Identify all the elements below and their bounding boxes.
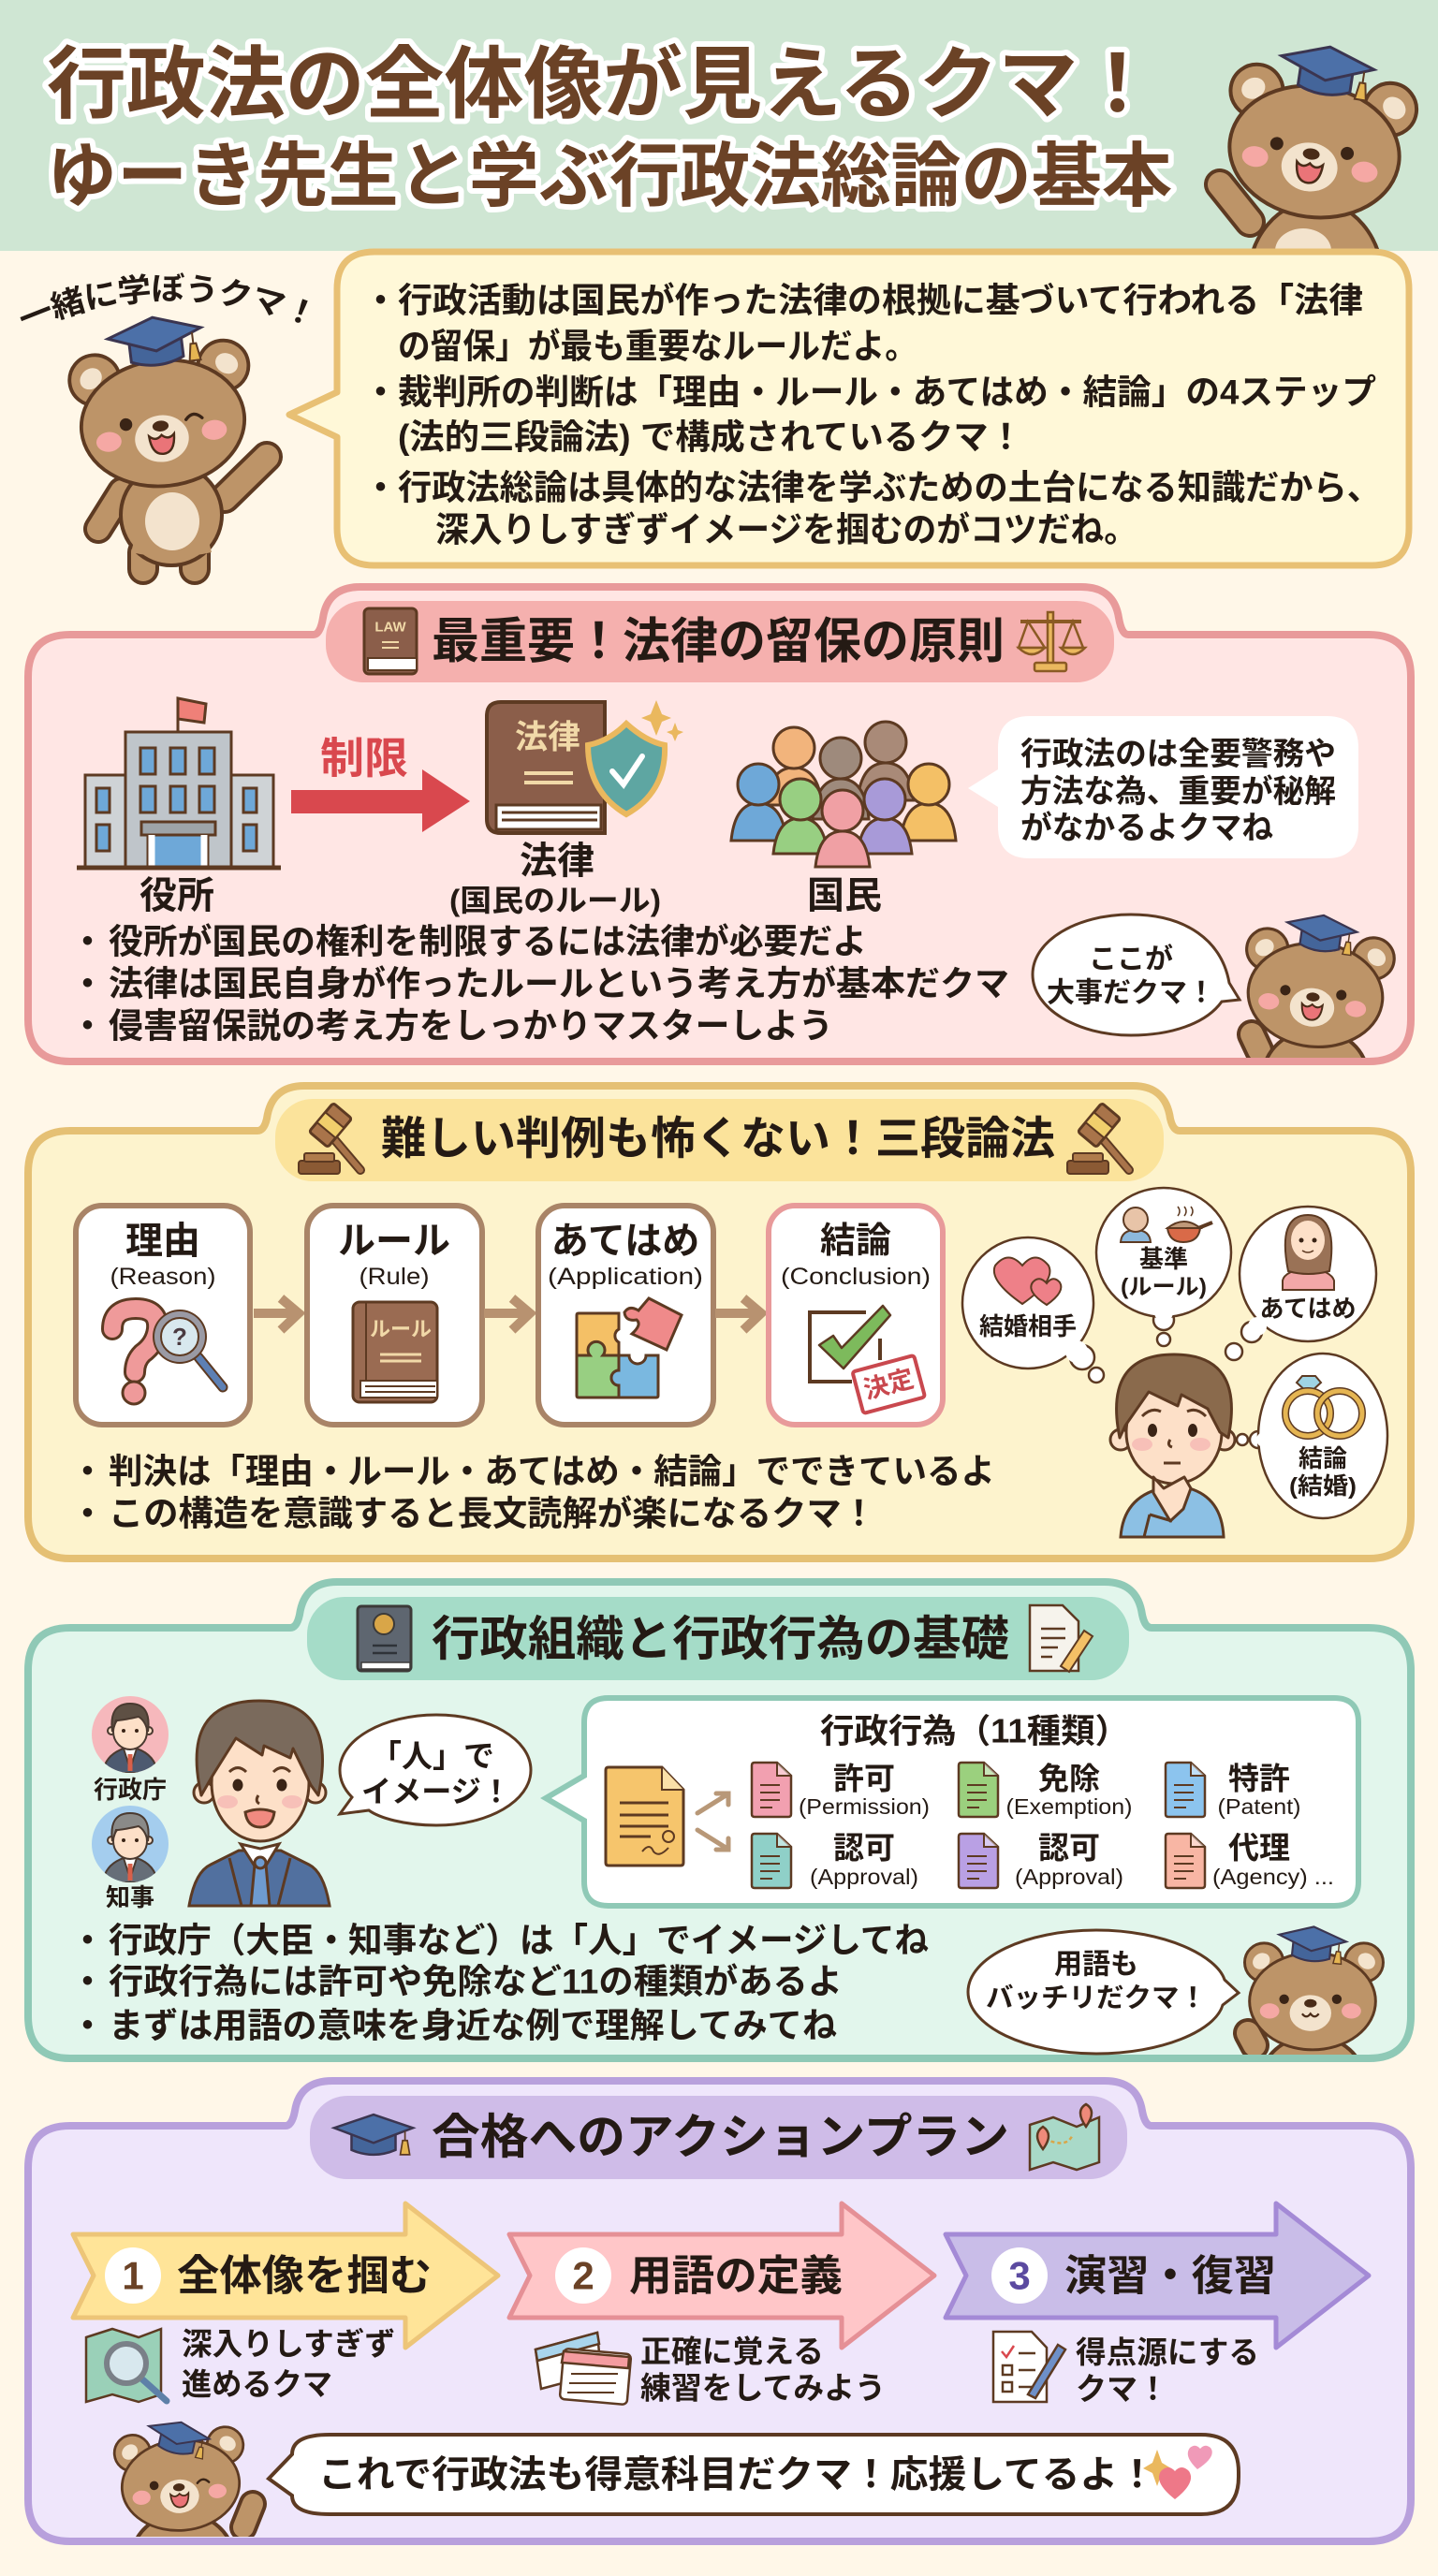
icon: passport book <box>358 1606 411 1671</box>
step 3 note: クマ！ <box>1076 2372 1168 2406</box>
thought bubble: 結論(結婚): (結婚) <box>1289 1473 1357 1500</box>
closing speech bubble <box>269 2435 1239 2514</box>
icon: scales <box>1019 612 1085 671</box>
step 2 note: 正確に覚える <box>640 2334 824 2368</box>
intro bullet points: ・ <box>363 468 398 507</box>
icon: graduation cap <box>334 2115 413 2155</box>
intro bullet points: 行政法総論は具体的な法律を学ぶための土台になる知識だから、 <box>398 468 1381 507</box>
heading pill <box>275 1099 1164 1181</box>
type: 代理 Agency: 代理 <box>1228 1831 1290 1865</box>
arrow <box>254 1298 299 1330</box>
callout: 人でイメージ: イメージ！ <box>361 1775 511 1808</box>
bullet list: 法律は国民自身が作ったルールという考え方が基本だクマ <box>109 964 1009 1003</box>
step 1 arrow: 全体像を掴む <box>177 2252 432 2299</box>
type: 特許 Patent <box>1166 1762 1301 1819</box>
step card: ルール: (Rule) <box>360 1264 429 1290</box>
thought bubble: あてはめ: あてはめ <box>1260 1295 1356 1323</box>
thought bubble: 結婚相手 <box>962 1237 1104 1383</box>
step 3 note <box>993 2332 1259 2406</box>
bullet list: 行政行為には許可や免除など11の種類があるよ <box>109 1962 843 2001</box>
thought bubble: 結婚相手: 結婚相手 <box>979 1312 1077 1340</box>
step card: 結論: 結論 <box>820 1222 891 1261</box>
intro bullet points: 深入りしすぎずイメージを掴むのがコツだね。 <box>435 511 1137 549</box>
bullet list: ・ <box>70 1007 105 1045</box>
arrow <box>715 1298 761 1330</box>
type: 免除 Exemption: 免除 <box>1038 1762 1100 1795</box>
panel: アクションプラン <box>28 2081 1411 2576</box>
arrows <box>697 1793 728 1850</box>
bullet list <box>70 923 1009 1045</box>
icon: rule book: ルール <box>370 1318 432 1340</box>
diagram labels <box>139 841 882 917</box>
panel: 行政行為 11 types <box>546 1698 1358 1906</box>
heading pill: 最重要！法律の留保の原則 <box>432 615 1005 669</box>
intro bullet points: 行政活動は国民が作った法律の根拠に基づいて行われる「法律 <box>398 281 1363 320</box>
bullet list: まずは用語の意味を身近な例で理解してみてね <box>109 2007 837 2044</box>
heading pill: 合格へのアクションプラン <box>432 2110 1009 2164</box>
bullet list: 侵害留保説の考え方をしっかりマスターしよう <box>109 1007 833 1045</box>
step card: 理由: 理由 <box>125 1221 200 1262</box>
icon: gavel right <box>1067 1103 1129 1174</box>
bullet list: ・ <box>70 1453 105 1490</box>
icon: citizens group <box>731 722 956 867</box>
callout: 人でイメージ <box>340 1715 531 1825</box>
bear <box>1233 1925 1385 2055</box>
step 1 arrow <box>73 2203 498 2348</box>
callout: 用語もバッチリ: バッチリだクマ！ <box>986 1983 1207 2013</box>
callout: ここが大事だクマ: 大事だクマ！ <box>1047 977 1215 1009</box>
type: 認可 Approval teal: (Approval) <box>810 1865 918 1889</box>
callout: 用語もバッチリ: 用語も <box>1054 1949 1138 1981</box>
intro bullet points: の留保」が最も重要なルールだよ。 <box>398 328 917 365</box>
header bear <box>1204 45 1419 249</box>
character: thinking boy <box>1110 1354 1235 1537</box>
type: 免除 Exemption <box>959 1762 1133 1819</box>
icon: law book with shield <box>487 700 683 833</box>
white speech bubble: 行政法のは全要警務や <box>1020 737 1336 772</box>
avatar: 知事 <box>92 1806 169 1911</box>
step 2 arrow: 2 <box>572 2254 594 2297</box>
bullet list: ・ <box>70 964 105 1003</box>
step card: 理由: (Reason) <box>110 1264 215 1290</box>
step 2 arrow <box>509 2203 934 2348</box>
icon: check and stamp: 決定 <box>860 1364 917 1404</box>
icon: question and magnifier <box>112 1309 223 1404</box>
type: 許可 Permission <box>752 1762 930 1819</box>
icon: checklist and pen <box>993 2332 1065 2402</box>
step 1 note: 深入りしすぎず <box>182 2327 395 2361</box>
step card: 結論 <box>769 1206 943 1425</box>
type: 免除 Exemption: (Exemption) <box>1005 1794 1133 1819</box>
diagram labels: (国民のルール) <box>449 884 661 917</box>
thought bubble: 基準: 基準 <box>1139 1245 1188 1273</box>
step 1 note: 進めるクマ <box>182 2366 332 2402</box>
character: explaining man <box>189 1701 330 1906</box>
title: 行政法の全体像が見えるクマ！ <box>47 40 1157 128</box>
heading pill: 難しい判例も怖くない！三段論法 <box>381 1114 1055 1164</box>
arrow <box>484 1298 530 1330</box>
type: 認可 Approval teal <box>752 1831 918 1889</box>
intro bullet points: ・ <box>363 281 398 320</box>
bullet list: 役所が国民の権利を制限するには法律が必要だよ <box>109 923 867 960</box>
step card: あてはめ <box>538 1206 713 1425</box>
bullet list: ・ <box>70 1921 105 1960</box>
panel: 行政組織と行政行為 <box>24 1578 1415 2062</box>
type: 許可 Permission: (Permission) <box>799 1794 930 1819</box>
diagram labels: 法律 <box>520 841 594 882</box>
type: 代理 Agency: (Agency) ... <box>1212 1865 1334 1889</box>
icon: question and magnifier: ? <box>172 1323 187 1351</box>
step card: あてはめ: (Application) <box>548 1264 703 1290</box>
thought bubble: 結論(結婚) <box>1237 1354 1387 1518</box>
step card: 理由 <box>76 1206 250 1425</box>
bear <box>112 2421 267 2537</box>
type: 代理 Agency <box>1166 1831 1334 1889</box>
icon: sparkle and hearts <box>1143 2446 1212 2499</box>
step 3 arrow <box>946 2203 1369 2348</box>
thought bubble: 基準: (ルール) <box>1121 1275 1207 1299</box>
icon: flash cards <box>536 2333 631 2405</box>
avatar: 知事: 知事 <box>106 1883 154 1911</box>
step 1 note <box>86 2327 395 2402</box>
bullet list: ・ <box>70 923 105 960</box>
arrow: 制限 <box>291 734 470 832</box>
icon: law book with shield: 法律 <box>515 719 580 756</box>
bullet list: ・ <box>70 1494 105 1533</box>
diagram labels: 役所 <box>139 875 214 916</box>
diagram labels: 国民 <box>807 875 882 916</box>
step card: ルール <box>307 1206 482 1425</box>
icon: route map <box>1030 2104 1099 2170</box>
type: 認可 Approval purple: (Approval) <box>1015 1865 1123 1889</box>
bullet list <box>70 1453 995 1533</box>
title <box>47 40 1172 215</box>
step 3 arrow: 3 <box>1008 2254 1031 2297</box>
intro bullet points: (法的三段論法) で構成されているクマ！ <box>398 417 1023 457</box>
icon: document and pencil <box>1030 1605 1093 1672</box>
bullet list: 行政庁（大臣・知事など）は「人」でイメージしてね <box>109 1921 929 1960</box>
step card: 結論: (Conclusion) <box>781 1264 931 1290</box>
step 2 note <box>536 2333 886 2406</box>
step card: あてはめ: あてはめ <box>551 1221 699 1262</box>
type: 許可 Permission: 許可 <box>833 1762 895 1795</box>
icon: rule book <box>353 1302 437 1402</box>
icon: puzzle <box>577 1298 682 1398</box>
white speech bubble <box>968 716 1358 858</box>
white speech bubble: がなかるよクマね <box>1020 810 1273 846</box>
bullet list: この構造を意識すると長文読解が楽になるクマ！ <box>109 1494 876 1533</box>
panel: 三段論法 <box>28 1086 1411 1559</box>
icon: law book <box>364 608 417 674</box>
callout: 人でイメージ: 「人」で <box>371 1739 494 1773</box>
type: 認可 Approval purple: 認可 <box>1038 1831 1100 1865</box>
header band <box>0 0 1438 251</box>
step 2 arrow: 用語の定義 <box>629 2252 843 2299</box>
step 3 note: 得点源にする <box>1076 2334 1259 2370</box>
avatar: 行政庁 <box>92 1696 169 1804</box>
icon: government building <box>77 698 281 868</box>
icon: certificate <box>606 1767 683 1866</box>
thought bubble: 基準 <box>1096 1188 1231 1346</box>
step card: ルール: ルール <box>338 1221 450 1262</box>
panel: 行政行為 11 types: 行政行為（11種類） <box>820 1711 1129 1750</box>
curved caption: 一緒に学ぼうクマ！ <box>21 272 308 323</box>
thought bubble: あてはめ <box>1225 1207 1376 1360</box>
arrow: 制限: 制限 <box>320 734 408 783</box>
heading pill: 行政組織と行政行為の基礎 <box>432 1612 1009 1666</box>
step 2 note: 練習をしてみよう <box>640 2370 886 2406</box>
avatar: 行政庁: 行政庁 <box>94 1776 167 1804</box>
thought bubble: 結論(結婚): 結論 <box>1299 1444 1347 1472</box>
step 1 arrow: 1 <box>122 2254 144 2297</box>
type: 認可 Approval teal: 認可 <box>833 1831 895 1865</box>
bear <box>1237 914 1396 1058</box>
heading pill <box>326 601 1114 682</box>
title: ゆーき先生と学ぶ行政法総論の基本 <box>47 137 1172 215</box>
icon: law book: LAW <box>374 620 407 635</box>
callout: ここが大事だクマ: ここが <box>1089 944 1173 975</box>
intro bear with caption <box>21 272 308 585</box>
bullet list: ・ <box>70 1962 105 2001</box>
panel: 法律の留保の原則 <box>28 587 1411 1123</box>
closing speech bubble: これで行政法も得意科目だクマ！応援してるよ！ <box>318 2454 1156 2496</box>
intro speech bubble <box>289 252 1409 565</box>
intro bullet points <box>363 281 1381 549</box>
bullet list: ・ <box>70 2007 105 2044</box>
intro bullet points: 裁判所の判断は「理由・ルール・あてはめ・結論」の4ステップ <box>398 373 1376 412</box>
icon: gavel left <box>299 1103 360 1174</box>
heading pill <box>307 1597 1129 1680</box>
heading pill <box>310 2096 1127 2179</box>
bullet list: 判決は「理由・ルール・あてはめ・結論」でできているよ <box>109 1453 995 1490</box>
callout: 用語もバッチリ <box>968 1930 1239 2054</box>
white speech bubble: 方法な為、重要が秘解 <box>1020 773 1336 810</box>
intro bullet points: ・ <box>363 373 398 412</box>
type: 認可 Approval purple <box>959 1831 1123 1889</box>
icon: check and stamp <box>810 1306 925 1413</box>
type: 特許 Patent: (Patent) <box>1217 1794 1301 1819</box>
step 3 arrow: 演習・復習 <box>1064 2252 1276 2299</box>
bear body <box>66 312 267 569</box>
bullet list <box>70 1921 929 2044</box>
type: 特許 Patent: 特許 <box>1228 1762 1290 1795</box>
callout: ここが大事だクマ <box>1033 915 1240 1035</box>
icon: map and magnifier <box>86 2329 167 2402</box>
